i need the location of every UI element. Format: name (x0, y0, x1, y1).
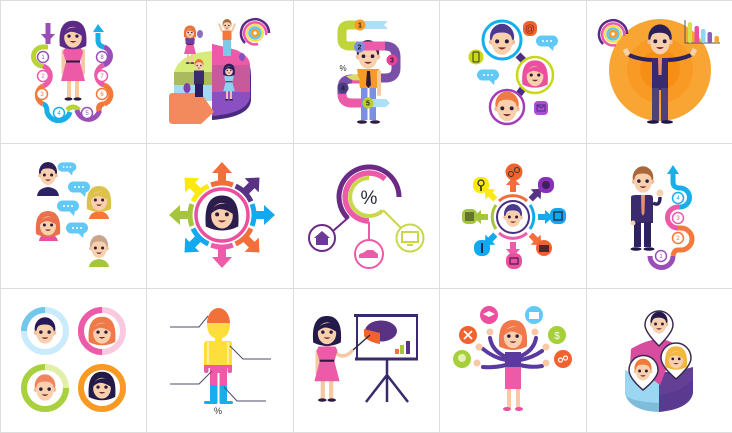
panel: woman presenting chart (313, 316, 418, 402)
ring: woman 100 percent (81, 367, 123, 409)
woman face (205, 195, 239, 231)
icon: envelope (506, 253, 522, 269)
numbered markers: 7 (100, 74, 104, 80)
connectors (518, 55, 525, 94)
panel: six-armed woman with icons (453, 306, 572, 411)
winding path (650, 165, 692, 268)
arms (483, 338, 542, 367)
numbered markers (656, 192, 684, 262)
callout lines (170, 316, 271, 401)
icon: puzzle (453, 350, 471, 368)
panel: woman in arrow ring (169, 162, 275, 268)
icon: link (554, 350, 572, 368)
winding path with arrows (34, 23, 111, 121)
numbered markers: 3 (676, 216, 680, 222)
icon: graduation cap (480, 306, 498, 324)
step badges: 2 (358, 44, 362, 52)
businessman (625, 24, 695, 124)
step badges: 1 (358, 22, 362, 30)
man with green shirt (89, 235, 109, 267)
numbered markers: 4 (676, 196, 680, 202)
small man, arms raised (219, 19, 235, 56)
icon: magnifier (473, 177, 489, 193)
bar chart (685, 20, 720, 43)
pin: blonde woman (661, 343, 691, 379)
icon: money bag: $ (554, 331, 560, 342)
icon: briefcase (525, 306, 543, 324)
panel: businessman on orange circle (599, 19, 720, 124)
panel: man with eight icons (462, 164, 566, 269)
woman presenter (313, 316, 353, 402)
pin: red-haired boy (629, 356, 658, 390)
blonde woman (87, 186, 111, 219)
panel: pie with location pins (625, 311, 693, 412)
numbered markers: 4 (57, 111, 61, 117)
panel: businessman on numbered path (630, 165, 692, 268)
pink ring (196, 189, 248, 241)
orange circle (609, 19, 711, 121)
panel: woman on numbered path (34, 21, 111, 121)
icon: at sign: @ (525, 24, 535, 35)
speech bubble (477, 70, 499, 85)
rainbow arcs (599, 20, 627, 45)
icon: phone (468, 50, 484, 64)
numbered markers: 1 (41, 55, 45, 61)
blue ring with man (483, 21, 521, 59)
speech bubble (66, 222, 88, 238)
pie chart on board (364, 320, 397, 344)
pin: man (645, 311, 673, 346)
panel: percent ring with three items (309, 167, 424, 268)
step badges: 4 (341, 86, 345, 92)
numbered markers: 5 (85, 111, 89, 117)
speech bubble (58, 162, 76, 176)
numbered markers: 1 (659, 254, 663, 260)
icon: envelope (534, 101, 548, 115)
speech bubble (536, 36, 558, 51)
segmented body figure (204, 308, 233, 404)
numbered markers: 2 (676, 236, 680, 242)
woman in pink dress (60, 21, 86, 101)
ring: smiling man 75 percent (24, 367, 66, 409)
icon: home (309, 225, 335, 251)
step badges (338, 20, 398, 108)
small woman in blue dress (223, 64, 235, 101)
icon: calendar (550, 208, 566, 224)
panel: social network faces (468, 21, 558, 124)
icon: gears (506, 164, 522, 180)
man with dark hair (37, 162, 59, 196)
step badges: 3 (390, 58, 394, 64)
panel: four faces in progress rings (24, 310, 123, 409)
small woman, top left (184, 26, 196, 64)
panel: body diagram (170, 308, 271, 416)
numbered markers (36, 52, 108, 118)
bars on board (395, 341, 410, 354)
rainbow arcs (241, 19, 269, 44)
icon: light bulb (538, 177, 554, 193)
step badges: 5 (366, 100, 370, 108)
percent label: % (214, 406, 222, 416)
green ring with pink-haired woman (517, 57, 553, 93)
speech bubble (57, 200, 79, 216)
panel: chatting people (36, 162, 111, 267)
numbered markers: 3 (40, 92, 44, 98)
speech bubble (68, 182, 90, 197)
woman body (499, 320, 527, 411)
man with orange shirt (346, 40, 381, 124)
top ribbon band (356, 42, 385, 50)
segmented ring (190, 183, 254, 247)
3D pie chart (625, 339, 693, 412)
icon: car (355, 240, 383, 268)
icon: pencil (474, 240, 490, 256)
pointer (353, 335, 370, 350)
concentric arcs (339, 167, 399, 221)
rear part of S ribbon (342, 25, 396, 103)
icon: briefcase (536, 240, 552, 256)
percent sign: % (361, 188, 378, 209)
red-haired woman (36, 211, 60, 241)
ribbon flags (360, 21, 390, 107)
icon: tools (459, 326, 477, 344)
panel: man with S ribbon (338, 20, 398, 124)
ring: red-haired woman 50 percent (81, 310, 123, 352)
segmented pie (169, 30, 251, 124)
panel: people on pie chart (169, 19, 269, 124)
eight arrows (169, 162, 275, 268)
percent label: % (339, 64, 347, 73)
arrows and ring (473, 177, 553, 257)
small man in suit (194, 59, 204, 97)
hands (474, 328, 550, 366)
icon: monitor (396, 224, 424, 252)
purple ring with red-haired man (490, 90, 524, 124)
icon: calculator (462, 209, 477, 224)
numbered markers: 6 (100, 92, 104, 98)
ring: sad man 25 percent (24, 310, 66, 352)
presentation board (354, 316, 418, 402)
numbered markers: 8 (100, 55, 104, 61)
businessman (630, 166, 664, 251)
connector lines (333, 210, 401, 240)
numbered markers: 2 (41, 74, 45, 80)
